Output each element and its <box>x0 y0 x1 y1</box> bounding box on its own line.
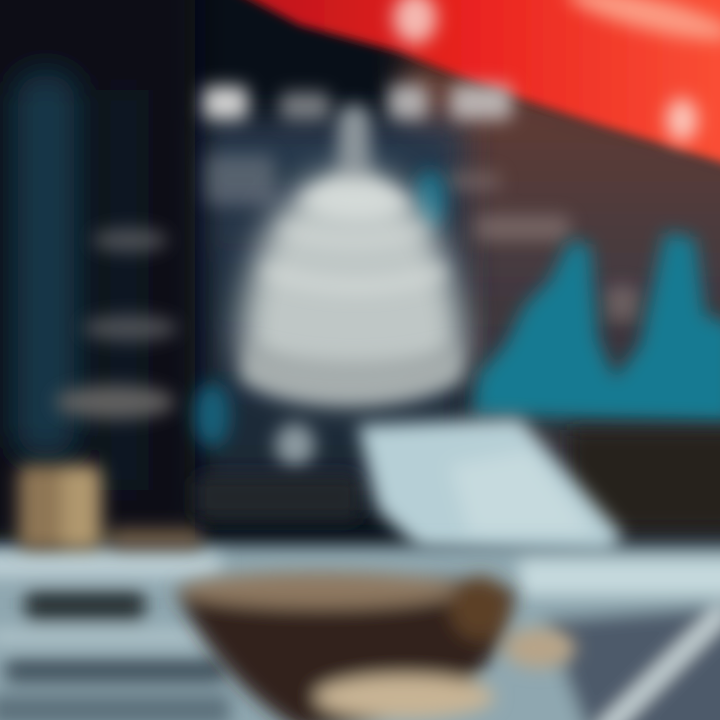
table surface <box>0 545 720 720</box>
dark lower-right band <box>570 430 720 530</box>
dark under dome <box>195 475 360 520</box>
teal chart <box>194 170 720 447</box>
dome detail <box>240 105 462 467</box>
left paper stack <box>0 555 230 720</box>
banner highlights <box>393 0 720 142</box>
red banner <box>215 0 720 168</box>
left column highlights <box>55 228 178 419</box>
panel: blue middle wall <box>195 120 465 510</box>
coin stack left <box>18 465 203 550</box>
panel: dark left building with columns <box>0 0 195 540</box>
paper document <box>358 418 622 558</box>
bronze bowl <box>175 572 576 720</box>
blurred text rows <box>205 155 639 321</box>
blurred headline <box>203 84 512 120</box>
panel: brown right wall <box>400 50 720 540</box>
capitol dome <box>240 170 465 399</box>
